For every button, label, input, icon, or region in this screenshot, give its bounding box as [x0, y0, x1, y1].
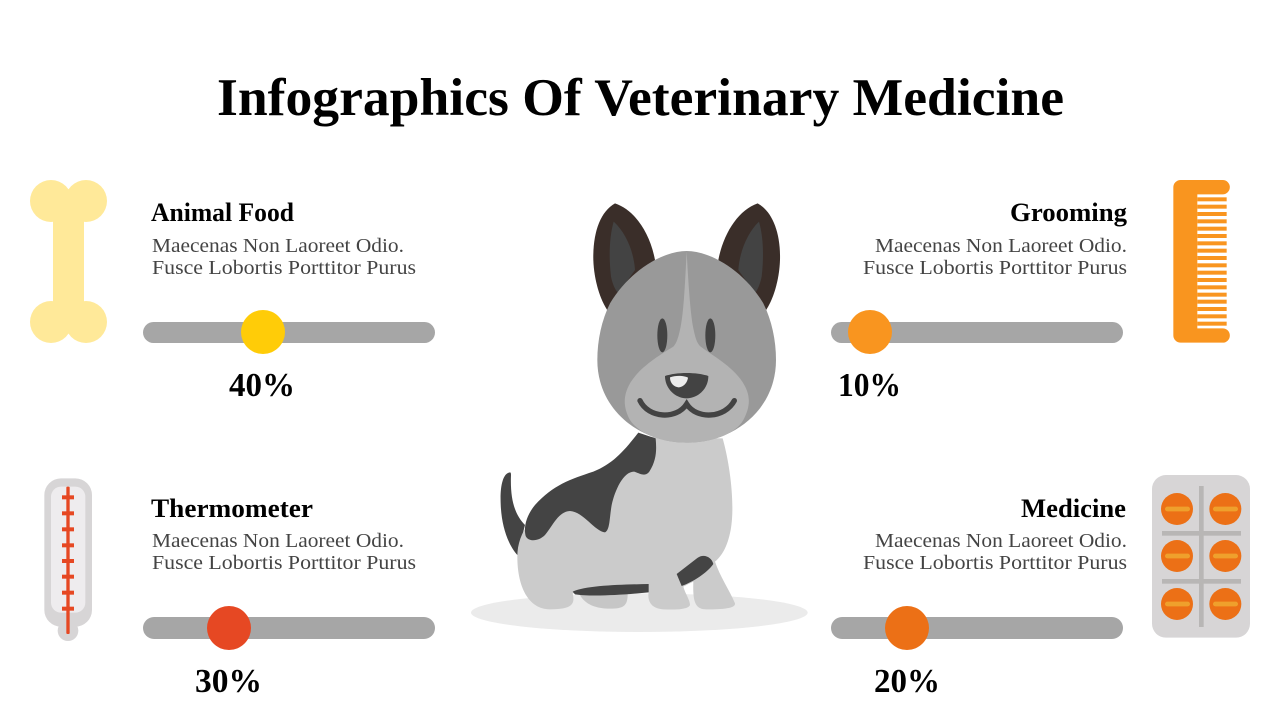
text block: grooming: Fusce Lobortis Porttitor Purus: [863, 257, 1127, 279]
nose highlight: [670, 376, 688, 387]
head: [597, 251, 776, 443]
heading: animal food: Animal Food: [151, 198, 295, 227]
text block: animal food: Maecenas Non Laoreet Odio.: [152, 235, 404, 257]
leg stripe: [573, 584, 649, 596]
text block: grooming: [863, 235, 1127, 279]
back patch: [525, 433, 656, 540]
text block: thermometer: [152, 530, 416, 574]
left inner ear: [610, 222, 635, 293]
body: [517, 437, 735, 610]
text block: medicine: Fusce Lobortis Porttitor Purus: [863, 552, 1127, 574]
eyes: [657, 318, 715, 352]
icon: comb: [1173, 180, 1230, 343]
heading: grooming: Grooming: [1010, 198, 1127, 227]
nose: [665, 373, 708, 398]
heading: thermometer: Thermometer: [151, 494, 313, 523]
right inner ear: [738, 222, 763, 293]
arm patch: [677, 556, 713, 586]
text block: animal food: Fusce Lobortis Porttitor Purus: [152, 257, 416, 279]
panel: grooming: [831, 180, 1230, 404]
panel: medicine: [831, 475, 1250, 700]
muzzle: [625, 252, 749, 443]
text block: thermometer: Maecenas Non Laoreet Odio.: [152, 530, 404, 552]
panel: thermometer: [44, 478, 435, 700]
ground shadow: [471, 593, 808, 632]
text block: grooming: Maecenas Non Laoreet Odio.: [875, 235, 1127, 257]
slider: 30 percent: [143, 606, 435, 650]
value: 10%: 10%: [838, 367, 901, 404]
illustration: dog: [471, 203, 808, 632]
back leg: [579, 594, 628, 609]
text block: thermometer: Fusce Lobortis Porttitor Purus: [152, 552, 416, 574]
value: 40%: 40%: [229, 367, 295, 404]
icon: thermometer: [44, 478, 92, 641]
text block: medicine: Maecenas Non Laoreet Odio.: [875, 530, 1127, 552]
text block: medicine: [863, 530, 1127, 574]
text block: animal food: [152, 235, 416, 279]
icon: bone: [30, 180, 107, 343]
tail: [501, 472, 525, 555]
slider: 40 percent: [143, 310, 435, 354]
slider: 10 percent: [831, 310, 1123, 354]
title: Infographics Of Veterinary Medicine: [217, 69, 1064, 127]
left ear: [593, 203, 655, 312]
icon: blister pack: [1152, 475, 1250, 638]
value: 30%: 30%: [195, 663, 262, 700]
mouth: [640, 401, 734, 415]
heading: medicine: Medicine: [1021, 494, 1126, 523]
slider: 20 percent: [831, 606, 1123, 650]
value: 20%: 20%: [874, 663, 940, 700]
right ear: [718, 203, 780, 312]
panel: animal food: [30, 180, 435, 404]
